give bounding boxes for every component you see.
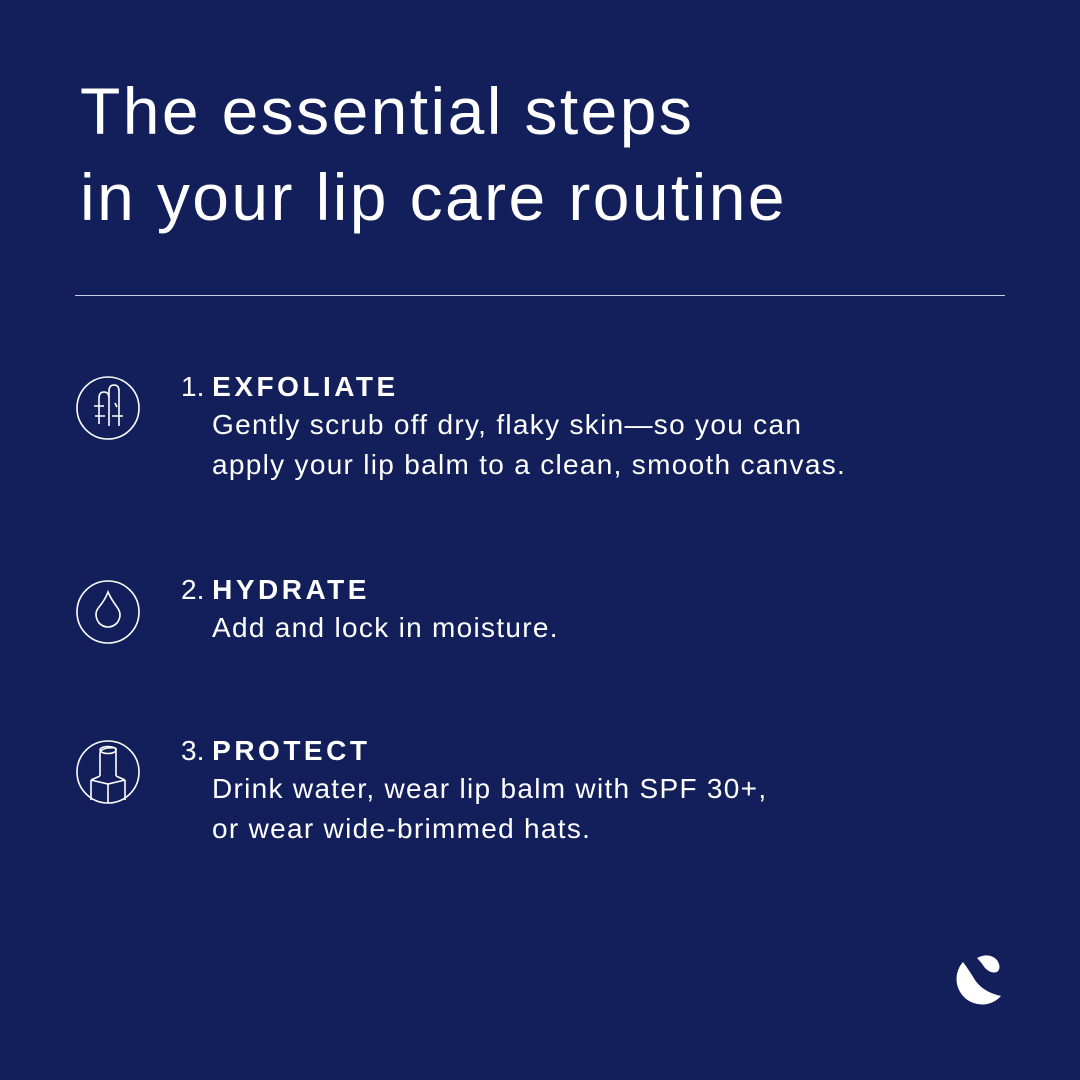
logo	[956, 955, 1001, 1004]
step 1: Gently scrub off dry, flaky skin—so you can	[212, 409, 802, 440]
step 1: 1. EXFOLIATE	[181, 371, 399, 402]
step 2: Add and lock in moisture.	[212, 612, 559, 643]
title	[80, 74, 787, 234]
step 3: Drink water, wear lip balm with SPF 30+,	[212, 773, 767, 804]
step 3: 3. PROTECT	[181, 735, 370, 766]
icon: lip balm	[76, 740, 140, 804]
step 2: 2. HYDRATE	[181, 574, 370, 605]
step 1	[181, 371, 846, 480]
step 1: apply your lip balm to a clean, smooth canvas.	[212, 449, 846, 480]
title: The essential steps	[80, 74, 694, 148]
icon: water drop	[76, 580, 140, 644]
step 3: or wear wide-brimmed hats.	[212, 813, 591, 844]
step 3	[181, 735, 767, 844]
title: in your lip care routine	[80, 160, 787, 234]
step 2	[181, 574, 559, 643]
icon: fingers	[76, 376, 140, 440]
